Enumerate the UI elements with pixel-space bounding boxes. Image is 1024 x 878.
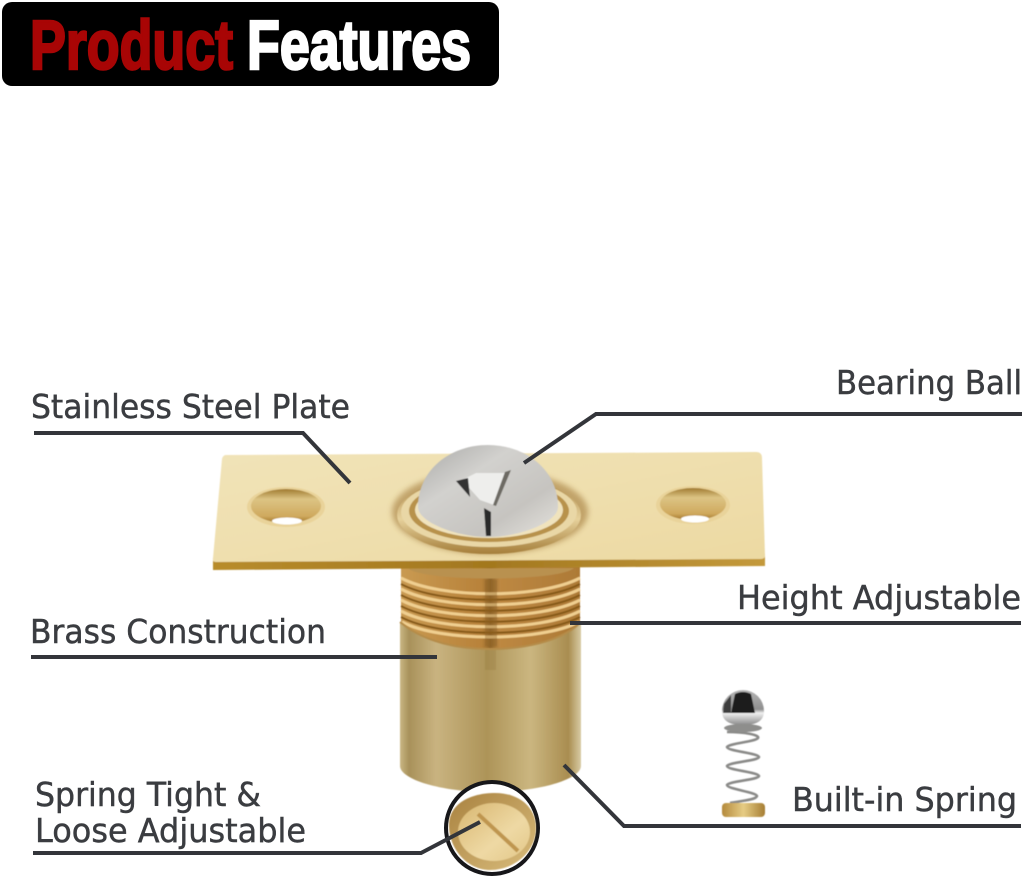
- label: Height Adjustable: Height Adjustable: [737, 578, 1021, 617]
- icon: right screw hole: [656, 486, 730, 524]
- small brass base: [722, 803, 765, 817]
- title word: Features: Features: [247, 6, 471, 84]
- leader: stainless steel plate: [34, 433, 350, 483]
- label: Stainless Steel Plate: Stainless Steel Plate: [31, 387, 350, 426]
- product: bearing ball and collar: [392, 445, 588, 554]
- small steel ball: [722, 690, 764, 725]
- label: Spring Tight and Loose Adjustable: [35, 775, 306, 850]
- product: threaded section: [401, 566, 580, 654]
- leader: height adjustable: [570, 621, 1021, 625]
- leader: built-in spring: [564, 765, 1021, 826]
- leader: spring tight and loose adjustable: [33, 822, 480, 853]
- label: Spring Tight and Loose Adjustable: Spring Tight &: [35, 775, 261, 814]
- leader: bearing ball: [524, 414, 1022, 463]
- leader: brass construction: [31, 655, 437, 659]
- label: Spring Tight and Loose Adjustable: Loose Adjustable: [35, 811, 306, 850]
- title word: Product: Product: [30, 6, 233, 84]
- product: brass plate: [213, 452, 765, 570]
- label: Built-in Spring: Built-in Spring: [792, 780, 1017, 819]
- inset: brass end cap circle: [446, 782, 538, 874]
- icon: spring and ball parts: [722, 690, 765, 817]
- product: cylinder body: [400, 622, 581, 792]
- title banner: [2, 2, 499, 86]
- spring coil: [727, 732, 759, 803]
- label: Brass Construction: Brass Construction: [30, 612, 326, 651]
- icon: left screw hole: [247, 487, 325, 527]
